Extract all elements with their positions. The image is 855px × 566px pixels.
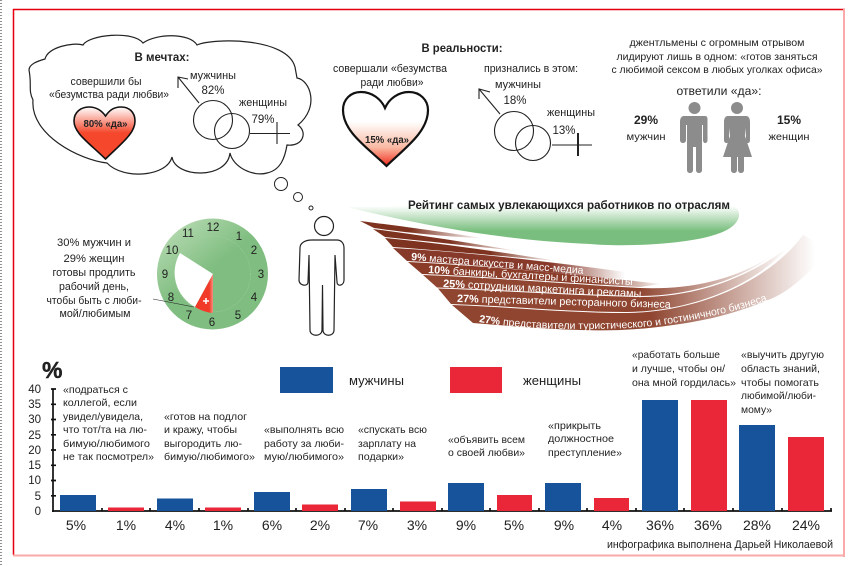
- y axis: 20: [28, 445, 41, 457]
- text: overtime: 30% мужчин и: [57, 237, 131, 249]
- text: 15 percent women: [768, 113, 810, 143]
- text: men 82: 82%: [201, 85, 225, 97]
- text: would commit follies: «безумства ради любви»: [49, 89, 169, 101]
- y axis: 30: [28, 414, 41, 426]
- annotation: cover crime: должностное: [548, 433, 614, 445]
- annotation: announce love: «объявить всем: [448, 434, 525, 446]
- panel: gentlemen: [612, 37, 823, 173]
- y axis: 15: [28, 460, 41, 472]
- heading: in reality: В реальности:: [422, 41, 502, 55]
- annotation: announce love: о своей любви»: [448, 447, 525, 459]
- annotation: fight colleague: бимую/любимого: [63, 438, 150, 450]
- panel: in reality: [333, 41, 595, 166]
- bars: [60, 400, 824, 511]
- annotation: theft: «готов на подлог: [164, 411, 247, 423]
- value labels: 24%: [792, 517, 820, 533]
- annotation: learn new field: область знаний,: [741, 363, 820, 375]
- heading: in dreams: В мечтах:: [134, 50, 190, 64]
- clock chart: 10: [166, 245, 178, 257]
- text: women 13: 13%: [552, 125, 576, 137]
- annotation: do all work: [264, 424, 344, 463]
- text: committed follies: совершали «безумства: [333, 63, 448, 75]
- credit: инфографика выполнена Дарьей Николаевой: [607, 539, 833, 551]
- y axis: 40: [28, 384, 41, 396]
- icon: heart 80 percent: 80% «да»: [84, 119, 128, 130]
- annotation: fight colleague: «подраться с: [63, 384, 128, 396]
- value labels: [66, 517, 820, 533]
- annotation: fight colleague: что тот/та на лю-: [63, 424, 148, 436]
- annotation: announce love: [448, 434, 525, 459]
- value labels: 9%: [456, 517, 476, 533]
- clock chart: 3: [258, 269, 264, 281]
- annotation: work harder: она мной гордилась»: [632, 377, 736, 389]
- text: gentlemen intro: лидируют лишь в одном: «готов заняться: [616, 51, 818, 63]
- text: admitted: признались в этом:: [484, 63, 578, 75]
- text: gentlemen intro: [612, 37, 823, 76]
- value labels: 1%: [213, 517, 233, 533]
- text: overtime: 29% жещин: [64, 253, 124, 265]
- value labels: 4%: [602, 517, 622, 533]
- legend: men: мужчины: [349, 373, 404, 388]
- value labels: 3%: [407, 517, 427, 533]
- text: overtime: чтобы быть с люби-: [46, 295, 142, 307]
- text: 15 percent women: 15%: [777, 113, 801, 127]
- legend: men: [280, 367, 404, 393]
- annotation: salary on gifts: «спускать всю: [358, 424, 427, 436]
- annotation: work harder: «работать больше: [632, 349, 720, 361]
- brown fan bands: [360, 221, 820, 330]
- annotation: learn new field: любимой/люби-: [741, 390, 816, 402]
- annotation: learn new field: «выучить другую: [741, 349, 824, 361]
- text: 10 percent bankers: 10% банкиры, бухгалтеры и финансисты: [428, 264, 633, 288]
- annotation: work harder: [632, 349, 736, 389]
- thought bubbles: [274, 178, 313, 210]
- annotation: salary on gifts: подарки»: [358, 451, 404, 463]
- text: women 79: [239, 97, 287, 126]
- percent axis title: %: [42, 357, 62, 383]
- text: committed follies: [333, 63, 448, 89]
- text: overtime: готовы продлить: [52, 267, 136, 279]
- text: gentlemen intro: с любимой сексом в любых уголках офиса»: [612, 64, 823, 76]
- panel: working day clock: [46, 218, 268, 330]
- text: would commit follies: [49, 76, 169, 101]
- text: overtime: мой/любимым: [60, 308, 130, 320]
- text: men 82: [190, 70, 236, 97]
- icon: heart 80 percent: [74, 107, 135, 159]
- icon: heart 15 percent: [343, 92, 428, 166]
- y axis: 35: [28, 399, 41, 411]
- annotation: learn new field: мому»: [741, 404, 772, 416]
- value labels: 5%: [504, 517, 524, 533]
- panel: rating by industry: [351, 198, 808, 330]
- panel: bar chart: [28, 349, 832, 533]
- annotation: theft: [164, 411, 255, 463]
- legend: women: женщины: [523, 373, 581, 388]
- text: would commit follies: совершили бы: [70, 76, 142, 88]
- heading: rating: Рейтинг самых увлекающихся работников по отраслям: [408, 198, 730, 212]
- icon: woman: [723, 102, 752, 173]
- clock chart: 11: [182, 228, 194, 240]
- text: women 13: [547, 107, 595, 137]
- text: 29 percent men: [626, 113, 666, 143]
- text: 27 percent restaurant: 27% представители ресторанного бизнеса: [457, 293, 671, 311]
- icon: thinking person: [299, 216, 344, 335]
- text: overtime: [46, 237, 142, 320]
- clock chart: 2: [251, 245, 257, 257]
- value labels: 36%: [646, 517, 674, 533]
- annotation: cover crime: [548, 420, 622, 459]
- annotation: fight colleague: увидел/увидела,: [63, 411, 143, 423]
- clock chart: [153, 218, 268, 330]
- annotation: fight colleague: коллегой, если: [63, 397, 137, 409]
- text: men 82: мужчины: [190, 70, 236, 82]
- annotation: fight colleague: не так посмотрел»: [63, 451, 154, 463]
- value labels: 36%: [694, 517, 722, 533]
- text: 9 percent arts and media: 9% мастера искусств и масс-медиа: [411, 251, 584, 277]
- annotation: theft: бимую/любимого»: [164, 451, 255, 463]
- text: women 13: женщины: [547, 107, 595, 119]
- clock chart: 8: [168, 292, 174, 304]
- value labels: 28%: [743, 517, 771, 533]
- text: men 18: мужчины: [495, 79, 541, 91]
- value labels: 4%: [165, 517, 185, 533]
- icon: gender symbols reality: [479, 89, 592, 160]
- text: 15 percent women: женщин: [768, 131, 810, 143]
- clock chart: 1: [236, 231, 242, 243]
- annotation: salary on gifts: зарплату на: [358, 438, 416, 450]
- cloud outline: [29, 35, 311, 174]
- text: 29 percent men: мужчин: [626, 131, 666, 143]
- annotation: learn new field: [741, 349, 824, 416]
- text: women 79: 79%: [251, 114, 275, 126]
- text: overtime: рабочий день,: [59, 281, 129, 293]
- x axis: [52, 508, 832, 511]
- text: men 18: 18%: [503, 95, 527, 107]
- text: men 18: [495, 79, 541, 107]
- annotation: do all work: «выполнять всю: [264, 424, 344, 436]
- green banner: [347, 201, 739, 245]
- text: gentlemen intro: джентльмены с огромным отрывом: [630, 37, 804, 49]
- y axis: 0: [35, 506, 41, 518]
- annotation: work harder: и лучше, чтобы он/: [632, 363, 725, 375]
- clock chart: 7: [186, 310, 192, 322]
- icon: man: [680, 102, 708, 173]
- y axis: [28, 384, 56, 518]
- text: women 79: женщины: [239, 97, 287, 109]
- annotation: fight colleague: [63, 384, 154, 463]
- annotation: theft: выгородить лю-: [164, 438, 243, 450]
- clock chart: 5: [235, 310, 241, 322]
- annotation: salary on gifts: [358, 424, 427, 463]
- text: committed follies: ради любви»: [360, 77, 424, 89]
- annotation: do all work: работу за люби-: [264, 438, 344, 450]
- panel: in dreams cloud: [29, 35, 311, 174]
- annotation: cover crime: преступление»: [548, 447, 622, 459]
- annotation: cover crime: «прикрыть: [548, 420, 602, 432]
- clock chart: 12: [207, 222, 219, 234]
- value labels: 2%: [310, 517, 330, 533]
- value labels: 9%: [554, 517, 574, 533]
- clock chart: 6: [209, 317, 215, 329]
- icon: gender symbols dreams: [178, 77, 290, 148]
- value labels: 1%: [116, 517, 136, 533]
- clock chart: 9: [162, 269, 168, 281]
- annotation: do all work: мую/любимого»: [264, 451, 344, 463]
- text: answered yes: ответили «да»:: [676, 84, 762, 98]
- y axis: 5: [35, 491, 41, 503]
- text: 27 percent tourism: 27% представители туристического и гостиничного бизнеса: [479, 296, 768, 330]
- y axis: 25: [28, 430, 41, 442]
- annotation: theft: и кражу, чтобы: [164, 424, 237, 436]
- value labels: 6%: [262, 517, 282, 533]
- text: 25 percent marketing: 25% сотрудники маркетинга и рекламы: [443, 278, 642, 300]
- text: 29 percent men: 29%: [634, 113, 658, 127]
- legend: women: [450, 367, 581, 393]
- annotation: learn new field: чтобы помогать: [741, 377, 820, 389]
- icon: heart 15 percent: 15% «да»: [365, 135, 409, 146]
- clock chart: 4: [251, 292, 258, 304]
- y axis: 10: [28, 475, 41, 487]
- value labels: 7%: [358, 517, 378, 533]
- value labels: 5%: [66, 517, 86, 533]
